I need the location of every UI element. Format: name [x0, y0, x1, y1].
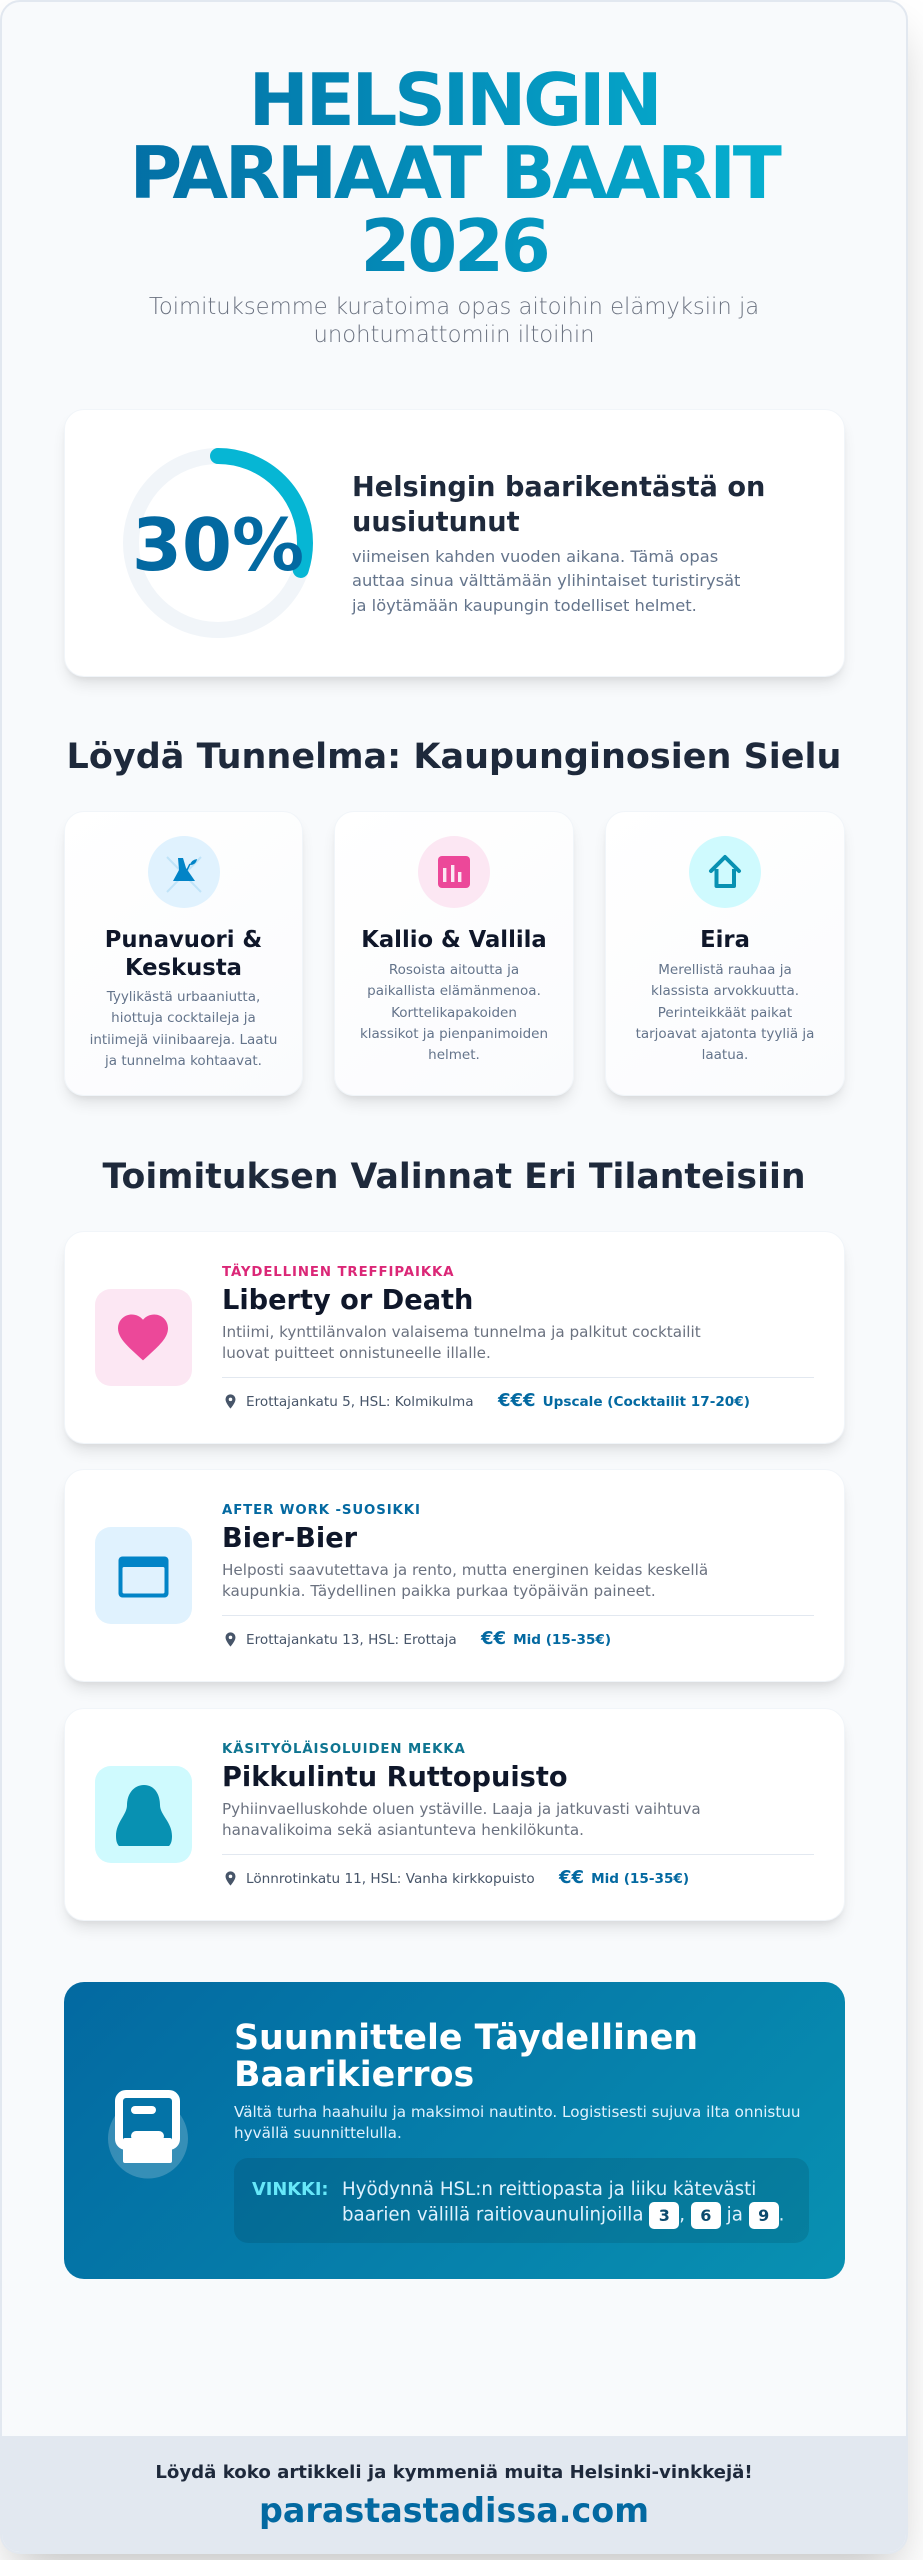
icon: location pin [226, 1871, 236, 1886]
stat text: viimeisen kahden vuoden aikana. Tämä opas [352, 547, 718, 566]
card text: hiottuja cocktaileja ja [111, 1010, 256, 1026]
panel: Punavuori & Keskusta [64, 811, 303, 1096]
card text: Merellistä rauhaa ja [658, 962, 792, 978]
cta text: hyvällä suunnittelulla. [234, 2124, 402, 2142]
icon: window [95, 1527, 192, 1624]
panel: Eira [605, 811, 845, 1096]
stat heading: uusiutunut [352, 507, 520, 538]
stat heading [352, 472, 765, 538]
icon: bar chart [418, 836, 490, 908]
icon: heart [95, 1289, 192, 1386]
stat text [352, 547, 740, 615]
description: kaupunkia. Täydellinen paikka purkaa työpäivän paineet. [222, 1582, 656, 1600]
card text: Rosoista aitoutta ja [389, 962, 519, 978]
panel: Bier-Bier [64, 1469, 845, 1682]
bar name: Bier-Bier [222, 1523, 357, 1554]
icon: house [689, 836, 761, 908]
category tag: TÄYDELLINEN TREFFIPAIKKA [222, 1265, 454, 1280]
card text [90, 989, 277, 1069]
heading: neighbourhoods: Löydä Tunnelma: Kaupunginosien Sielu [67, 737, 841, 777]
panel: Pikkulintu Ruttopuisto [64, 1708, 845, 1921]
cta heading: Baarikierros [234, 2055, 474, 2095]
stat text: ja löytämään kaupungin todelliset helmet. [352, 596, 697, 615]
tip text: baarien välillä raitiovaunulinjoilla , ja . [342, 2204, 784, 2226]
card text [636, 962, 814, 1063]
tip box [234, 2158, 809, 2243]
panel: Kallio & Vallila [334, 811, 574, 1096]
subtitle: Toimituksemme kuratoima opas aitoihin elämyksiin ja [149, 294, 759, 320]
card text: klassista arvokkuutta. [651, 983, 799, 999]
card text [360, 962, 548, 1063]
cta heading [234, 2018, 698, 2095]
icon: tram [108, 2090, 188, 2178]
panel: call to action [64, 1982, 845, 2279]
card text: helmet. [428, 1047, 480, 1063]
icon: bottle [95, 1766, 192, 1863]
description: Pyhiinvaelluskohde oluen ystäville. Laaja ja jatkuvasti vaihtuva [222, 1800, 701, 1818]
category tag: AFTER WORK -SUOSIKKI [222, 1503, 421, 1518]
card title [105, 927, 262, 980]
description: luovat puitteet onnistuneelle illalle. [222, 1344, 491, 1362]
category tag: KÄSITYÖLÄISOLUIDEN MEKKA [222, 1742, 466, 1757]
bar name: Pikkulintu Ruttopuisto [222, 1762, 568, 1793]
card title: Kallio & Vallila [361, 927, 547, 953]
description: Helposti saavutettava ja rento, mutta energinen keidas keskellä [222, 1561, 708, 1579]
cta text: Vältä turha haahuilu ja maksimoi nautinto. Logistisesti sujuva ilta onnistuu [234, 2103, 801, 2121]
icon: cocktail [148, 836, 220, 908]
address: Lönnrotinkatu 11, HSL: Vanha kirkkopuisto [246, 1871, 535, 1887]
tip text: 9 [758, 2206, 769, 2225]
price: €€ Mid (15-35€) [481, 1628, 611, 1649]
tip text [342, 2179, 784, 2229]
card text: paikallista elämänmenoa. [367, 983, 541, 999]
card text: ja tunnelma kohtaavat. [105, 1053, 262, 1069]
description: Intiimi, kynttilänvalon valaisema tunnelma ja palkitut cocktailit [222, 1323, 701, 1341]
card text: intiimejä viinibaareja. Laatu [90, 1032, 277, 1048]
address: Erottajankatu 13, HSL: Erottaja [246, 1632, 457, 1648]
card text: Perinteikkäät paikat [658, 1005, 792, 1021]
footer [2, 2436, 906, 2552]
donut chart: 30% [123, 448, 313, 638]
cta heading: Suunnittele Täydellinen [234, 2018, 698, 2058]
subtitle [149, 294, 759, 348]
title: HELSINGIN [249, 58, 659, 142]
tip text: Hyödynnä HSL:n reittiopasta ja liiku kätevästi [342, 2179, 756, 2200]
stat text: auttaa sinua välttämään ylihintaiset turistirysät [352, 571, 740, 590]
panel: stat card [64, 409, 845, 677]
cta text [234, 2103, 801, 2142]
footer text: Löydä koko artikkeli ja kymmeniä muita Helsinki-vinkkejä! [155, 2462, 753, 2483]
bar name: Liberty or Death [222, 1285, 473, 1316]
icon: location pin [226, 1394, 236, 1408]
description: hanavalikoima sekä asiantunteva henkilökunta. [222, 1821, 584, 1839]
price: €€€ Upscale (Cocktailit 17-20€) [498, 1390, 750, 1411]
icon: location pin [226, 1632, 236, 1646]
tip text: 3 [659, 2206, 670, 2225]
title: PARHAAT BAARIT [129, 131, 779, 215]
address: Erottajankatu 5, HSL: Kolmikulma [246, 1394, 474, 1410]
heading: editors' picks: Toimituksen Valinnat Eri Tilanteisiin [102, 1157, 806, 1197]
title: 2026 [360, 204, 548, 288]
tip label: VINKKI: [252, 2179, 329, 2200]
card title: Punavuori & [105, 927, 262, 953]
card text: Tyylikästä urbaaniutta, [107, 989, 260, 1005]
footer link: parastastadissa.com [259, 2491, 649, 2530]
subtitle: unohtumattomiin iltoihin [313, 322, 594, 348]
description [222, 1800, 701, 1839]
stat heading: Helsingin baarikentästä on [352, 472, 765, 503]
description [222, 1323, 701, 1362]
tip text: 6 [700, 2206, 711, 2225]
title [64, 64, 844, 282]
card text: Korttelikapakoiden [391, 1005, 517, 1021]
panel: Liberty or Death [64, 1231, 845, 1444]
stat number: 30% [132, 503, 304, 587]
card title: Keskusta [125, 954, 242, 980]
card text: tarjoavat ajatonta tyyliä ja [636, 1026, 814, 1042]
description [222, 1561, 708, 1600]
card text: laatua. [702, 1047, 748, 1063]
price: €€ Mid (15-35€) [559, 1867, 689, 1888]
card title: Eira [700, 927, 750, 953]
card text: klassikot ja pienpanimoiden [360, 1026, 548, 1042]
